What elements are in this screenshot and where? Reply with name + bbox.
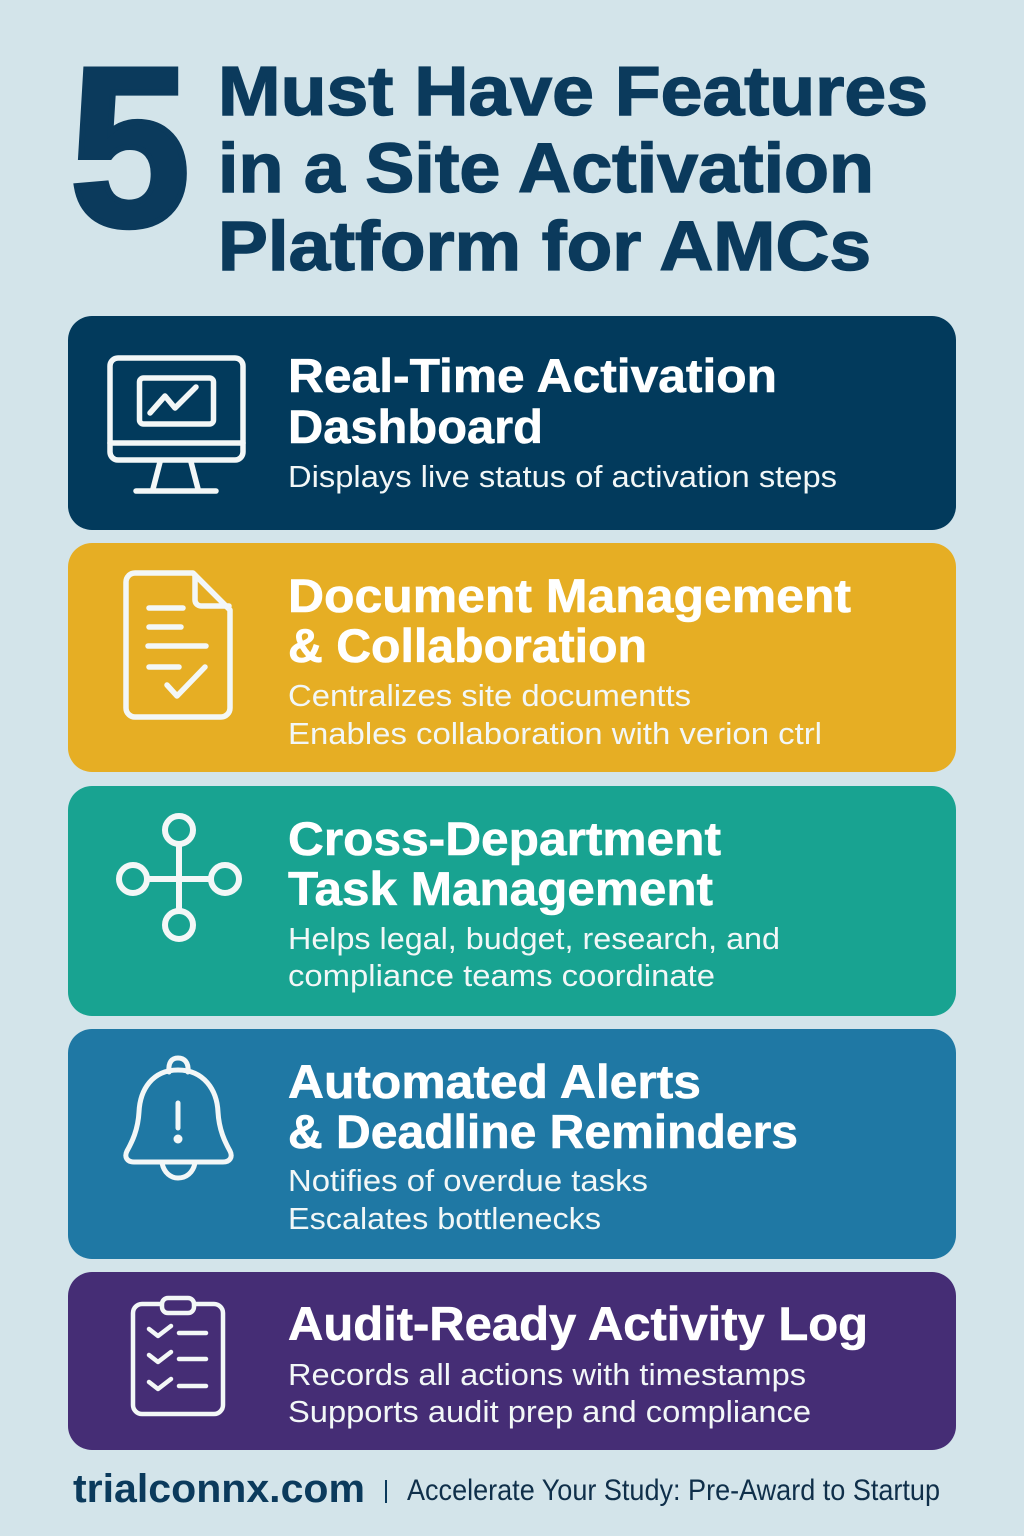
- description: Supports audit prep and compliance: [288, 1394, 811, 1429]
- panel: cross-department task management: [68, 786, 956, 1016]
- tagline: Accelerate Your Study: Pre-Award to Startup: [407, 1474, 940, 1507]
- website: trialconnx.com: [73, 1467, 365, 1511]
- card background: [68, 316, 956, 530]
- title line 3: Platform for AMCs: [218, 207, 871, 285]
- heading: Dashboard: [288, 400, 543, 453]
- card background: [68, 1272, 956, 1450]
- heading: & Collaboration: [288, 619, 647, 672]
- description: Notifies of overdue tasks: [288, 1163, 648, 1198]
- description: Displays live status of activation steps: [288, 459, 837, 494]
- heading: Real-Time Activation: [288, 349, 777, 402]
- description: Enables collaboration with verion ctrl: [288, 716, 822, 751]
- description: Escalates bottlenecks: [288, 1201, 601, 1236]
- separator: [385, 1480, 387, 1503]
- icon: clipboard checklist: [133, 1298, 223, 1414]
- card background: [68, 786, 956, 1016]
- icon: connected nodes: [119, 816, 239, 939]
- title: [70, 20, 928, 285]
- big number 5: 5: [70, 20, 190, 273]
- panel: automated alerts and deadline reminders: [68, 1029, 956, 1259]
- panel: audit-ready activity log: [68, 1272, 956, 1450]
- icon: monitor with chart: [110, 358, 243, 491]
- heading: Audit-Ready Activity Log: [288, 1297, 868, 1350]
- heading: Automated Alerts: [288, 1055, 701, 1108]
- description: compliance teams coordinate: [288, 958, 715, 993]
- panel: real-time activation dashboard: [68, 316, 956, 530]
- footer: [73, 1467, 940, 1511]
- heading: Task Management: [288, 862, 713, 915]
- heading: Document Management: [288, 569, 851, 622]
- title line 2: in a Site Activation: [218, 129, 874, 207]
- description: Centralizes site documentts: [288, 678, 691, 713]
- card background: [68, 543, 956, 772]
- title line 1: Must Have Features: [218, 52, 928, 130]
- description: Helps legal, budget, research, and: [288, 921, 780, 956]
- icon: bell with exclamation: [126, 1058, 231, 1178]
- panel: document management and collaboration: [68, 543, 956, 772]
- icon: document with check: [126, 573, 230, 717]
- card background: [68, 1029, 956, 1259]
- heading: Cross-Department: [288, 812, 721, 865]
- heading: & Deadline Reminders: [288, 1105, 798, 1158]
- description: Records all actions with timestamps: [288, 1357, 806, 1392]
